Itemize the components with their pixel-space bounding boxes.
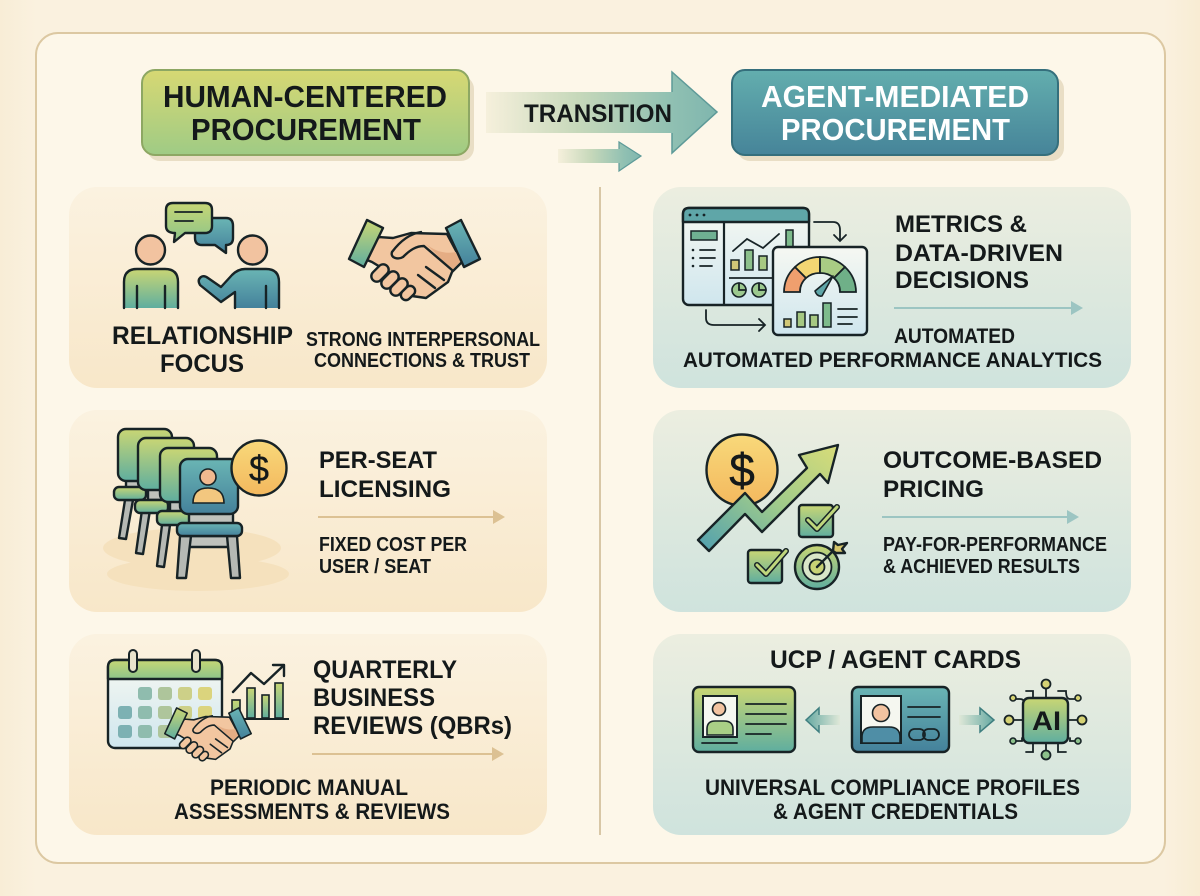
text: fixed cost per seat: USER / SEAT xyxy=(319,556,431,578)
heading: agent-mediated procurement xyxy=(732,70,1064,161)
icon: profile card xyxy=(693,687,795,752)
icon: small handshake xyxy=(165,708,251,762)
arrow: transition xyxy=(486,72,717,153)
icon: growth chart xyxy=(232,665,289,719)
arrow: small transition xyxy=(558,142,641,171)
text: outcome-based pricing: OUTCOME-BASED xyxy=(883,447,1102,474)
text: fixed cost per seat xyxy=(319,534,467,578)
text: automated performance analytics xyxy=(683,325,1102,372)
text: periodic manual assessments: ASSESSMENTS & REVIEWS xyxy=(174,799,450,824)
panel: per-seat licensing xyxy=(69,410,547,612)
arrow: per-seat xyxy=(318,510,505,524)
text: quarterly business reviews xyxy=(313,656,512,740)
text: per-seat licensing xyxy=(319,447,451,503)
text: pay-for-performance xyxy=(883,534,1107,578)
text: relationship focus xyxy=(112,322,293,378)
panel: relationship focus xyxy=(69,187,547,388)
text: quarterly business reviews: QUARTERLY xyxy=(313,656,457,684)
arrow: right xyxy=(959,708,994,732)
text: outcome-based pricing: PRICING xyxy=(883,476,984,503)
icon: coin and rising arrow xyxy=(698,434,838,551)
heading: ucp agent cards: UCP / AGENT CARDS xyxy=(770,646,1021,674)
text: fixed cost per seat: FIXED COST PER xyxy=(319,534,467,556)
heading: agent-mediated procurement: AGENT-MEDIATED xyxy=(761,79,1029,114)
text: quarterly business reviews: BUSINESS xyxy=(313,684,435,712)
icon: ai chip xyxy=(1004,680,1086,760)
text: strong interpersonal connections: CONNECTIONS & TRUST xyxy=(314,350,530,372)
text: quarterly business reviews: REVIEWS (QBRs) xyxy=(313,712,512,740)
arrow: metrics xyxy=(894,301,1083,315)
panel: ucp agent cards xyxy=(653,634,1131,835)
text: strong interpersonal connections: STRONG INTERPERSONAL xyxy=(306,329,540,351)
icon: checkmarks and target xyxy=(748,505,847,589)
text: relationship focus: FOCUS xyxy=(160,350,244,378)
arrow: outcome xyxy=(882,510,1079,524)
text: universal compliance profiles: & AGENT CREDENTIALS xyxy=(773,799,1018,824)
text: universal compliance profiles: UNIVERSAL COMPLIANCE PROFILES xyxy=(705,775,1080,800)
panel: metrics and data-driven decisions xyxy=(653,187,1131,388)
icon: calendar xyxy=(108,650,222,748)
text: automated performance analytics: AUTOMATED PERFORMANCE ANALYTICS xyxy=(683,349,1102,372)
text: pay-for-performance: PAY-FOR-PERFORMANCE xyxy=(883,534,1107,556)
text: pay-for-performance: & ACHIEVED RESULTS xyxy=(883,556,1080,578)
icon: handshake xyxy=(349,220,480,302)
text: universal compliance profiles xyxy=(705,775,1080,824)
icon: coin and rising arrow: $ xyxy=(729,444,755,496)
arrow: qbr xyxy=(312,747,504,761)
panel: outcome-based pricing xyxy=(653,410,1131,612)
arrow: left xyxy=(806,708,840,732)
text: metrics and data-driven decisions: DATA-DRIVEN xyxy=(895,240,1063,267)
icon: analytics dashboard xyxy=(683,208,867,335)
text: metrics and data-driven decisions xyxy=(895,211,1063,294)
arrow: transition: TRANSITION xyxy=(524,100,672,128)
heading: human-centered procurement: PROCUREMENT xyxy=(191,112,421,147)
heading: agent-mediated procurement: PROCUREMENT xyxy=(781,112,1010,147)
text: strong interpersonal connections xyxy=(306,329,540,372)
text: metrics and data-driven decisions: METRICS & xyxy=(895,211,1027,238)
heading: human-centered procurement: HUMAN-CENTERED xyxy=(163,79,447,114)
panel: quarterly business reviews xyxy=(69,634,547,835)
text: automated performance analytics: AUTOMATED xyxy=(894,325,1015,348)
text: per-seat licensing: PER-SEAT xyxy=(319,447,437,474)
text: metrics and data-driven decisions: DECISIONS xyxy=(895,267,1029,294)
icon: ai chip: AI xyxy=(1032,706,1061,736)
heading: human-centered procurement xyxy=(142,70,474,161)
text: relationship focus: RELATIONSHIP xyxy=(112,322,293,350)
text: outcome-based pricing xyxy=(883,447,1102,503)
text: per-seat licensing: LICENSING xyxy=(319,476,451,503)
text: periodic manual assessments xyxy=(174,775,450,824)
icon: chairs and coin: $ xyxy=(249,448,269,489)
icon: agent card xyxy=(852,687,949,752)
icon: chairs and coin xyxy=(103,429,289,591)
text: periodic manual assessments: PERIODIC MANUAL xyxy=(210,775,408,800)
icon: two people talking xyxy=(124,203,279,308)
